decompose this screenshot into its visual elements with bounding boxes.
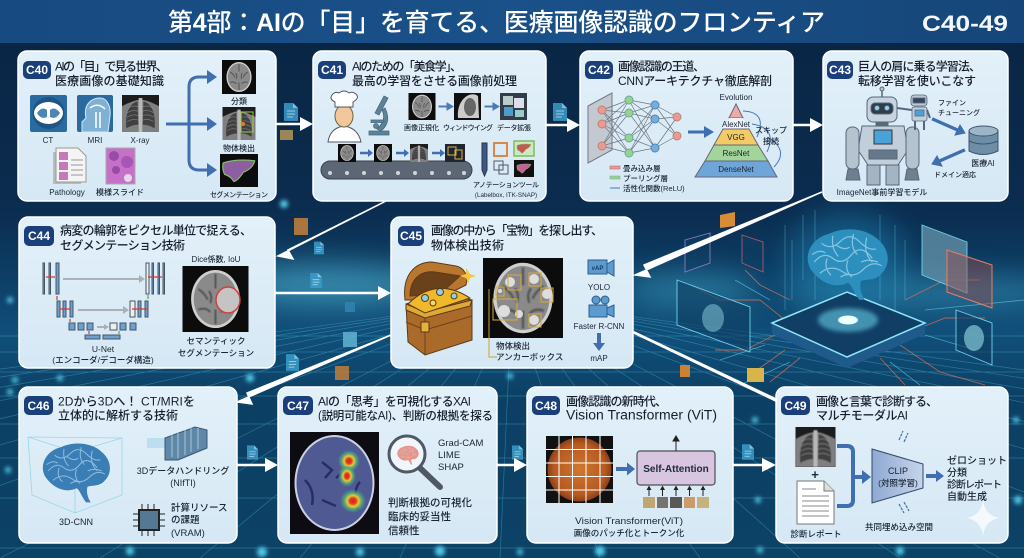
panel: C43 <box>823 51 1008 201</box>
labels: preprocessing: 画像正規化 <box>404 123 439 132</box>
arrow: domain adaptation <box>932 149 965 166</box>
icon: pathology document <box>53 148 86 184</box>
callout: anchor box: アンカーボックス <box>496 352 563 362</box>
heading C43 <box>858 58 981 88</box>
label: compute resources: の課題 <box>171 515 200 526</box>
badge C44 <box>24 226 54 246</box>
heading C47: AIの「思考」を可視化するXAI <box>318 394 471 408</box>
heading C42: CNNアーキテクチャ徹底解剖 <box>618 73 772 88</box>
heading C42: 画像認識の王道、 <box>618 58 705 74</box>
heading C44: セグメンテーション技術 <box>60 238 185 252</box>
label detection: 物体検出 <box>223 143 255 153</box>
panel: C47 <box>278 387 497 543</box>
label: skip connection: 接続 <box>763 136 779 146</box>
image: classification <box>222 60 256 94</box>
heading C43: 転移学習を使いこなす <box>858 73 976 88</box>
panel: C49 <box>776 387 1008 543</box>
panel: C40 <box>18 51 276 201</box>
heading C41: 最高の学習をさせる画像前処理 <box>352 73 517 88</box>
model: CLIP: (対照学習) <box>878 478 918 488</box>
icon: camera YOLO <box>588 260 614 276</box>
label: XAI methods <box>438 438 483 473</box>
label: fine tuning: チューニング <box>938 108 980 117</box>
label Pathology: Pathology <box>49 188 85 197</box>
image: tumor MRI <box>182 266 248 332</box>
badge C43: C43 <box>829 63 851 77</box>
flow arrows between panels <box>237 117 823 472</box>
label: outputs: ゼロショット <box>947 454 1007 467</box>
heading C42 <box>618 58 772 88</box>
label: compute resources <box>171 502 228 539</box>
pyramid: evolution: Evolution <box>720 93 752 102</box>
badge C41: C41 <box>321 63 343 77</box>
label: medical AI: 医療AI <box>971 158 995 168</box>
pyramid: evolution: ResNet <box>723 149 750 158</box>
arrow: to architectures <box>688 126 714 138</box>
label: rationale <box>388 496 472 537</box>
label: 3D-CNN: 3D-CNN <box>59 517 93 527</box>
pyramid: evolution: DenseNet <box>718 165 755 174</box>
heading C48 <box>566 394 717 422</box>
label: rationale: 信頼性 <box>388 524 420 537</box>
label: outputs: 分類 <box>947 466 967 479</box>
icon: chef <box>328 91 361 142</box>
conveyor belt <box>321 144 472 179</box>
label: skip connection: スキップ <box>755 126 787 135</box>
model: CLIP: CLIP <box>888 466 908 476</box>
image: Grad-CAM heatmap <box>290 432 379 534</box>
label: XAI methods: SHAP <box>438 462 464 473</box>
heading C46: 立体的に解析する技術 <box>58 408 178 422</box>
badge C42 <box>585 61 613 79</box>
label: semantic segmentation: セマンティック <box>186 336 246 346</box>
label slide: 模様スライド <box>96 187 144 197</box>
icon: small robot <box>897 95 930 130</box>
label X-ray: X-ray <box>130 136 150 145</box>
label MRI: MRI <box>88 136 102 145</box>
arrows: three tasks <box>166 70 217 177</box>
heading C44 <box>60 222 252 252</box>
label: skip connection <box>755 126 787 146</box>
small file icons on background <box>247 103 754 460</box>
label CT: CT <box>43 136 53 145</box>
labels: preprocessing: ウィンドウイング <box>443 123 493 132</box>
badge C40 <box>23 61 51 79</box>
label: outputs: 診断レポート <box>947 478 1002 491</box>
label: domain adaptation: ドメイン適応 <box>934 170 976 179</box>
icon: CT <box>30 95 67 132</box>
box: Self-Attention: Self-Attention <box>643 464 709 475</box>
icon: MRI <box>77 95 113 132</box>
heading C49: マルチモーダルAI <box>816 408 908 422</box>
heading C45: 画像の中から「宝物」を探し出す、 <box>431 222 603 238</box>
label: mAP: mAP <box>590 354 608 363</box>
heading C47 <box>318 394 493 422</box>
badge C44: C44 <box>28 229 50 243</box>
label: U-Net <box>52 344 154 365</box>
label: joint embedding: 共同埋め込み空間 <box>865 522 933 532</box>
badge C42: C42 <box>588 63 610 77</box>
heading C44: 病変の輪郭をピクセル単位で捉える、 <box>60 222 252 238</box>
image: segmentation <box>220 154 258 187</box>
arrows: inputs merge <box>837 446 871 506</box>
panel: C44 <box>19 217 275 368</box>
hologram scene: brain on chip <box>677 210 1024 385</box>
label: 3D data handling: (NIfTI) <box>170 478 196 488</box>
image: windowing <box>454 93 481 120</box>
panel: C45 <box>391 217 633 368</box>
labels: annotation tools: アノテーションツール <box>473 181 539 189</box>
panel: C42 <box>580 51 793 201</box>
icon: treasure chest <box>405 262 476 355</box>
panel: C46 <box>19 387 237 543</box>
icon: annotation tools <box>482 141 534 177</box>
tokens <box>643 486 709 508</box>
label: Dice: Dice係数, IoU <box>192 254 241 264</box>
caption: ViT: Vision Transformer(ViT) <box>575 516 683 527</box>
icon: microscope <box>369 96 389 135</box>
badge C46: C46 <box>27 399 50 413</box>
heading C40 <box>55 58 168 88</box>
sparkle <box>966 500 1000 536</box>
label: outputs <box>947 454 1007 503</box>
label: ImageNet model: ImageNet事前学習モデル <box>837 187 927 197</box>
label: outputs: 自動生成 <box>947 490 987 503</box>
label classification: 分類 <box>231 96 247 106</box>
arrow: fine tuning <box>932 118 965 135</box>
dashes: embedding arrows <box>899 431 909 513</box>
heading C43: 巨人の肩に乗る学習法、 <box>858 58 981 74</box>
label: semantic segmentation <box>178 336 254 358</box>
heading C48: 画像認識の新時代、 <box>566 394 667 408</box>
badge C45 <box>398 226 424 246</box>
labels: preprocessing <box>404 123 531 132</box>
heading C46: 2Dから3Dへ！ CT/MRIを <box>58 394 195 408</box>
heading C45: 物体検出技術 <box>431 238 504 252</box>
chapter range: C40-49 <box>922 11 1008 36</box>
badge C47: C47 <box>287 399 309 413</box>
callout: anchor box <box>489 289 563 362</box>
label: Faster R-CNN: Faster R-CNN <box>574 322 625 331</box>
icon: camera YOLO: vAP <box>592 266 603 272</box>
diagram: U-Net <box>43 263 164 339</box>
legend: layers: 畳み込み層 <box>623 164 660 173</box>
heading C41: AIのための「美食学」、 <box>352 58 462 74</box>
icon: NIfTI stack <box>147 427 207 460</box>
callout: anchor box: 物体検出 <box>496 341 530 351</box>
label: fine tuning: ファイン <box>938 99 966 107</box>
badge C49: C49 <box>784 399 807 413</box>
model: CLIP <box>872 449 923 503</box>
icon: report document <box>797 481 834 524</box>
panel: C48 <box>527 387 733 543</box>
arrows: preprocessing <box>439 103 499 110</box>
caption: ViT: 画像のパッチ化とトークン化 <box>574 528 685 538</box>
heading C49 <box>816 394 938 422</box>
label: XAI methods: LIME <box>438 450 460 461</box>
badge C48 <box>532 396 560 415</box>
plus sign: + <box>811 467 819 482</box>
labels: annotation tools: (Labelbox, ITK-SNAP) <box>475 192 537 199</box>
image: slide <box>106 148 135 184</box>
image: X-ray <box>122 95 159 132</box>
label segmentation: セグメンテーション <box>210 190 268 199</box>
badge C40: C40 <box>26 63 48 77</box>
pyramid: evolution: VGG <box>727 133 745 142</box>
label: XAI methods: Grad-CAM <box>438 438 483 449</box>
arrow: to mAP <box>593 333 605 351</box>
arrow: to attention <box>616 462 635 476</box>
label: report: 診断レポート <box>790 529 842 539</box>
label: 3D data handling <box>137 465 229 488</box>
label: fine tuning <box>938 99 980 117</box>
icon: magnifier with brain <box>389 436 440 487</box>
label: compute resources: (VRAM) <box>171 528 205 539</box>
heading C47: (説明可能なAI)、判断の根拠を探る <box>318 408 493 422</box>
box: Self-Attention <box>637 451 715 485</box>
header bar <box>0 0 1024 43</box>
heading C49: 画像と言葉で診断する、 <box>816 394 938 408</box>
heading C40: 医療画像の基礎知識 <box>55 73 164 88</box>
heading C45 <box>431 222 603 252</box>
pyramid: evolution <box>695 93 781 177</box>
badge C48: C48 <box>535 399 557 413</box>
label: U-Net: (エンコーダ/デコーダ構造) <box>52 355 154 365</box>
labels: annotation tools <box>473 181 539 199</box>
labels: preprocessing: データ拡張 <box>497 123 531 132</box>
label: rationale: 臨床的妥当性 <box>388 510 451 523</box>
image: data augmentation <box>500 93 527 120</box>
label: YOLO: YOLO <box>588 283 610 292</box>
image: detection <box>222 107 256 140</box>
image: detection MRI <box>483 258 563 338</box>
badge C43 <box>827 61 853 79</box>
arrow: outputs <box>926 470 944 482</box>
icon: 3D brain in wire cube <box>28 437 122 513</box>
diagram: CNN network <box>588 93 681 163</box>
caption: ViT <box>574 516 685 538</box>
label: rationale: 判断根拠の可視化 <box>388 496 472 509</box>
badge C45: C45 <box>400 229 422 243</box>
arrow: output <box>673 436 679 451</box>
label: compute resources: 計算リソース <box>171 502 228 514</box>
label: 3D data handling: 3Dデータハンドリング <box>137 465 229 476</box>
badge C47 <box>283 396 313 415</box>
badge C46 <box>24 396 53 415</box>
label: semantic segmentation: セグメンテーション <box>178 348 254 358</box>
icon: large robot <box>846 87 919 185</box>
heading C48: Vision Transformer (ViT) <box>566 408 717 422</box>
legend: layers: 活性化関数(ReLU) <box>623 183 685 193</box>
panel: C41 <box>313 51 546 201</box>
badge C41 <box>318 61 346 79</box>
legend: layers: プーリング層 <box>623 173 668 183</box>
title: 第4部：AIの「目」を育てる、医療画像認識のフロンティア <box>168 9 825 37</box>
image: chest X-ray <box>796 427 836 467</box>
image: normalization <box>408 93 436 120</box>
badge C49 <box>781 396 810 415</box>
icon: chip <box>133 504 165 536</box>
heading C46 <box>58 394 195 422</box>
legend: layers <box>610 164 685 193</box>
pyramid: evolution: AlexNet <box>722 120 751 129</box>
label: U-Net: U-Net <box>92 344 115 354</box>
image: retina patches <box>546 436 613 503</box>
heading C40: AIの「目」で見る世界、 <box>55 58 168 74</box>
icon: database <box>969 126 998 154</box>
heading C41 <box>352 58 517 88</box>
icon: camera Faster R-CNN <box>589 296 614 317</box>
